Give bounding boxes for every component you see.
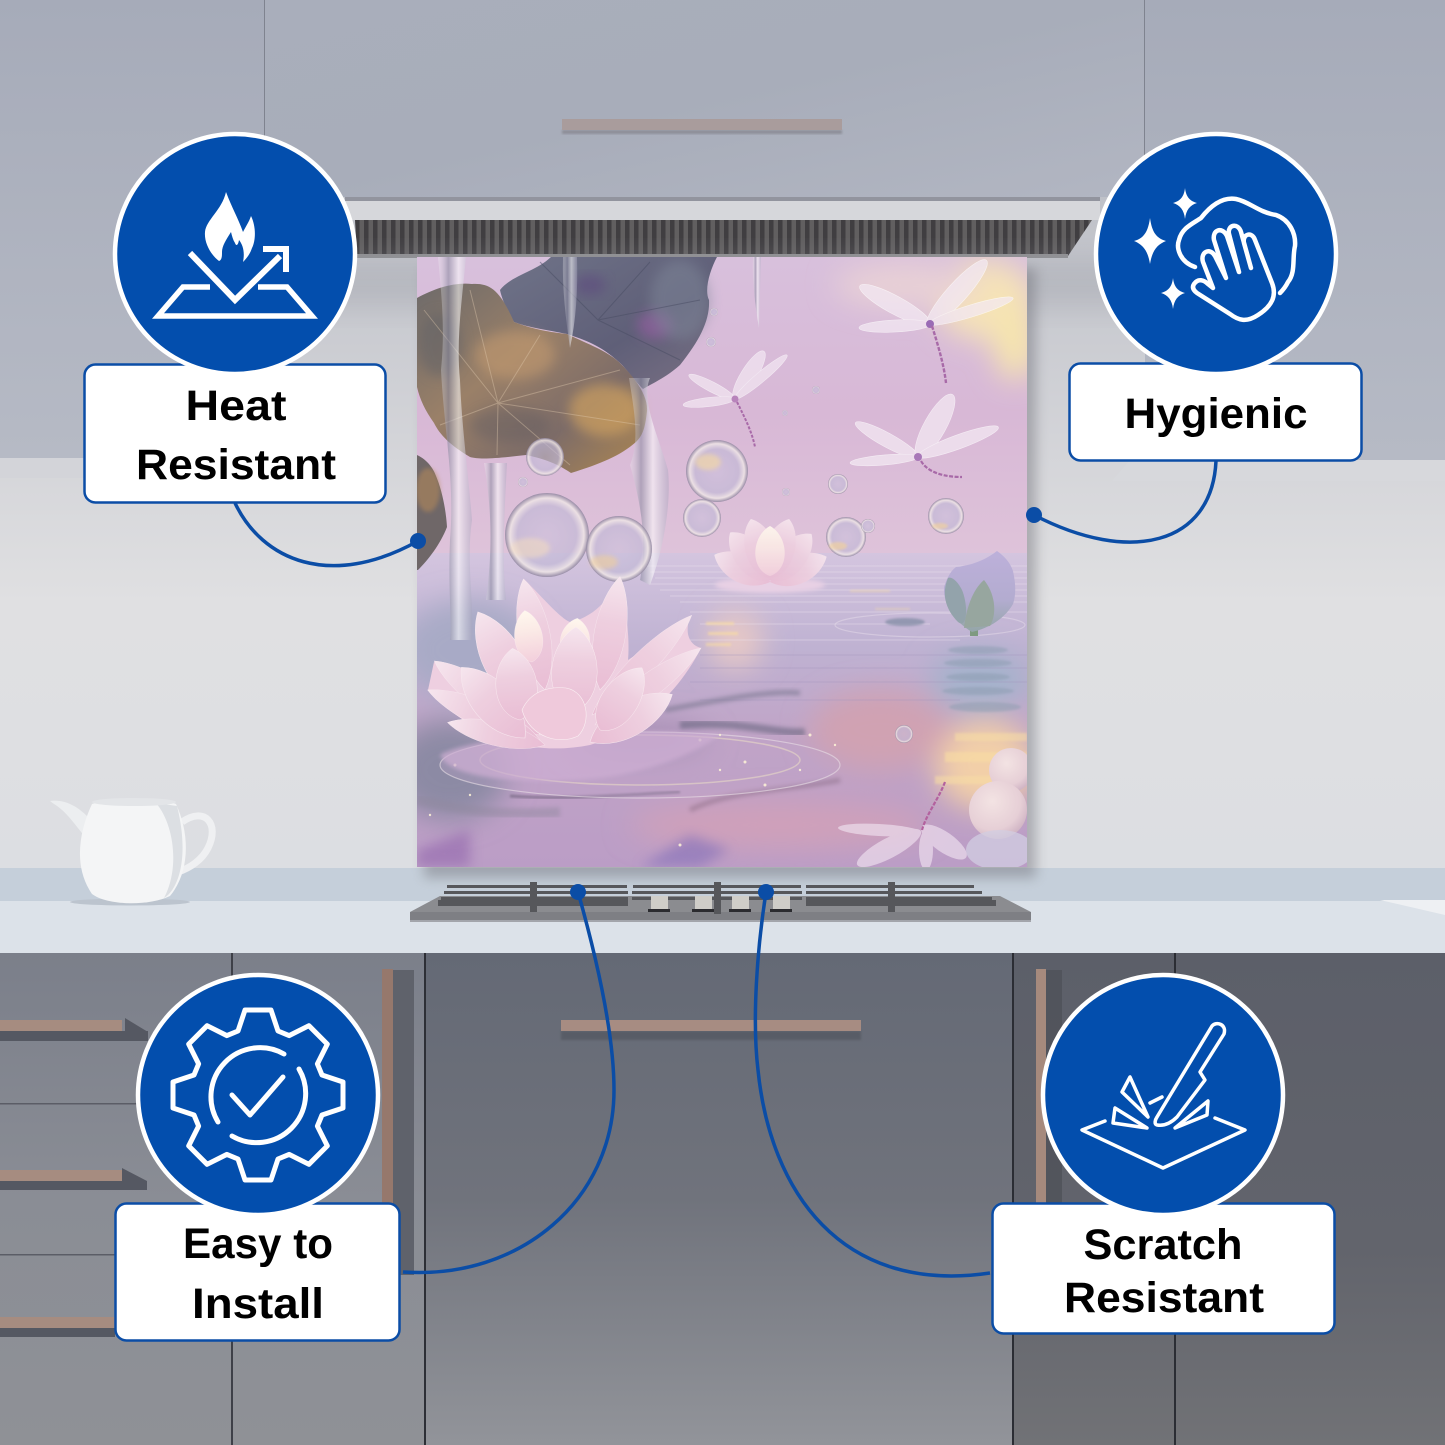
- heading: hygienic: Hygienic: [1124, 390, 1308, 438]
- icon: knife scratching surface: [1082, 1024, 1245, 1168]
- dragonfly: reflection: [838, 782, 1027, 867]
- water glow: [390, 600, 1035, 849]
- water: [417, 553, 1027, 867]
- artwork panel: water lily scene: [390, 254, 1037, 874]
- sky: [417, 257, 1027, 567]
- ripples: [640, 566, 1027, 700]
- dragonfly: middle: [683, 347, 790, 447]
- sun reflection flecks: [706, 590, 1027, 784]
- connector: scratch resistant: [755, 884, 990, 1276]
- heading: easy to install: Install: [192, 1280, 324, 1328]
- label box: heat resistant: [84, 364, 386, 502]
- pearls: [969, 748, 1027, 836]
- dark swirl ripples: [417, 613, 1025, 867]
- icon: hand wiping with sparkles: [1134, 188, 1295, 320]
- lily pad: lower left: [416, 455, 447, 570]
- feature: heat resistant: [84, 134, 386, 502]
- dragonfly: right: [850, 389, 1001, 477]
- label box: hygienic: [1070, 364, 1362, 460]
- bubbles: [505, 308, 964, 743]
- lower cabinet: centre: [426, 953, 1012, 1445]
- handle: left vertical: [382, 969, 414, 1275]
- wall: [0, 197, 1445, 877]
- heading: scratch resistant: Scratch: [1084, 1221, 1242, 1269]
- bud reflection: [942, 646, 1021, 712]
- handles: left drawers: [0, 1018, 148, 1337]
- hob: [410, 882, 1031, 922]
- upper cabinet: right: [1112, 0, 1445, 481]
- connector: hygienic: [1026, 461, 1216, 542]
- heading: easy to install: Easy to: [183, 1220, 333, 1268]
- panel shadow: [424, 268, 1036, 878]
- icon: flame and deflected arrow: [158, 192, 312, 316]
- upper cabinet: centre: [265, 0, 1144, 197]
- handle: centre drawer: [561, 1020, 861, 1040]
- lower cabinet: left: [0, 953, 426, 1445]
- feature: hygienic: [1070, 134, 1362, 460]
- connector: easy to install: [403, 884, 614, 1273]
- water columns: [438, 257, 761, 640]
- lily pad: gold: [417, 284, 647, 473]
- lower cabinet: right: [1012, 953, 1445, 1445]
- hood shadow: [270, 258, 1160, 308]
- label box: scratch resistant: [992, 1204, 1334, 1334]
- badge circle: heat resistant: [115, 134, 355, 374]
- heading: heat resistant: Resistant: [136, 441, 336, 489]
- lotus: main bloom: [422, 574, 720, 781]
- sunset clouds: [835, 260, 1037, 380]
- icon: gear with check mark: [173, 1010, 343, 1180]
- heading: scratch resistant: Resistant: [1064, 1274, 1264, 1322]
- worktop: [0, 868, 1445, 953]
- connector: heat resistant: [235, 503, 426, 566]
- extractor hood: [345, 197, 1100, 258]
- badge circle: easy to install: [138, 975, 378, 1215]
- dragonfly: top right: [856, 254, 1015, 383]
- heading: heat resistant: Heat: [186, 382, 286, 430]
- upper cabinet: left: [0, 0, 265, 478]
- cabinet handle: top: [562, 119, 842, 134]
- sparkles: [429, 734, 836, 846]
- teapot: [50, 798, 212, 906]
- lotus bud: [944, 551, 1015, 636]
- label box: easy to install: [116, 1204, 400, 1340]
- handle: right vertical: [1036, 969, 1062, 1210]
- feature: scratch resistant: [992, 975, 1334, 1334]
- feature: easy to install: [116, 975, 400, 1340]
- lily pad: dark: [500, 257, 717, 389]
- badge circle: scratch resistant: [1043, 975, 1283, 1215]
- lotus: distant: [714, 519, 826, 594]
- badge circle: hygienic: [1096, 134, 1336, 374]
